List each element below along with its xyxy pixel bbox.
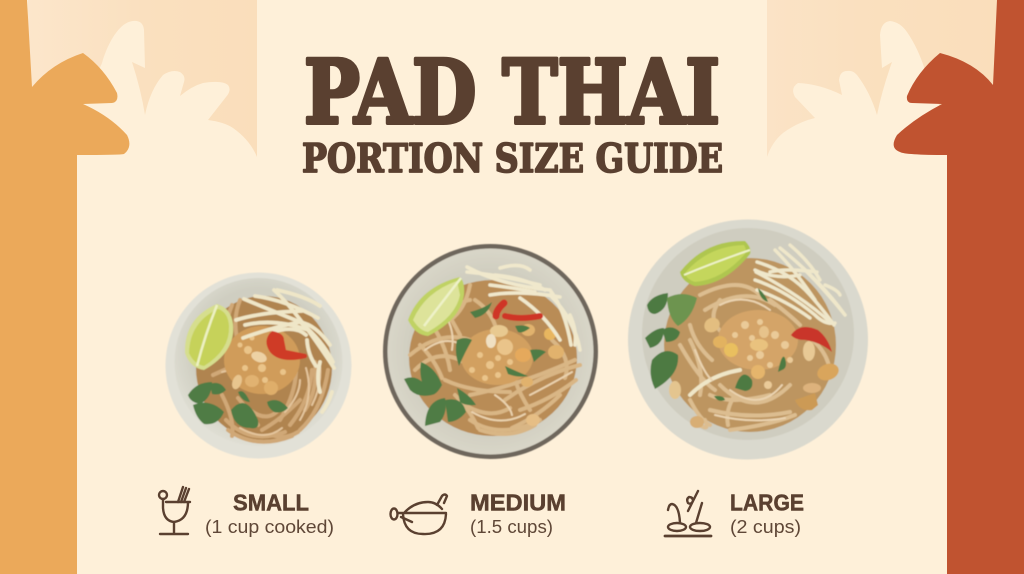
small bowl [166, 272, 352, 458]
label: large: (2 cups) [730, 517, 801, 537]
bean sprouts: small [236, 290, 334, 412]
lime wedge: medium [408, 277, 464, 336]
noodles: medium [409, 280, 580, 436]
label: large: LARGE [730, 490, 804, 516]
lime wedge: small [185, 304, 233, 370]
icon: medium wok [390, 494, 447, 534]
noodles: large [664, 258, 836, 432]
peanut topping: large [669, 310, 841, 428]
label: medium [470, 490, 566, 537]
peanut topping: medium [461, 324, 564, 426]
subtitle: PORTION SIZE GUIDE [302, 136, 723, 182]
icon: small glass with fork [159, 487, 190, 534]
left orange palm column [0, 0, 129, 574]
label: large [730, 490, 804, 537]
label: small: (1 cup cooked) [205, 517, 334, 537]
bean sprouts: large [755, 245, 845, 325]
large bowl [628, 220, 868, 460]
left cream palm silhouette [60, 21, 257, 200]
lime wedge: large [680, 241, 750, 286]
label: small: SMALL [233, 490, 309, 516]
basil leaves: medium [404, 302, 546, 426]
right cream palm silhouette [767, 21, 960, 200]
title: PAD THAI [304, 40, 720, 144]
chili: medium [496, 303, 540, 318]
peanut topping: small [224, 326, 300, 395]
bean sprouts: medium [467, 265, 580, 350]
chili: small [266, 331, 307, 360]
medium bowl [383, 244, 598, 459]
basil leaves: large [645, 288, 786, 401]
label: medium: MEDIUM [470, 490, 566, 516]
label: medium: (1.5 cups) [470, 517, 553, 537]
basil leaves: small [188, 382, 288, 428]
panel: left peach backdrop [28, 0, 257, 157]
icon: large chopsticks and bowls [665, 491, 711, 536]
label: small [205, 490, 334, 537]
noodles: small [196, 296, 332, 442]
right terracotta palm column [894, 0, 1024, 574]
chili: large [791, 327, 832, 352]
panel: right peach backdrop [767, 0, 997, 157]
